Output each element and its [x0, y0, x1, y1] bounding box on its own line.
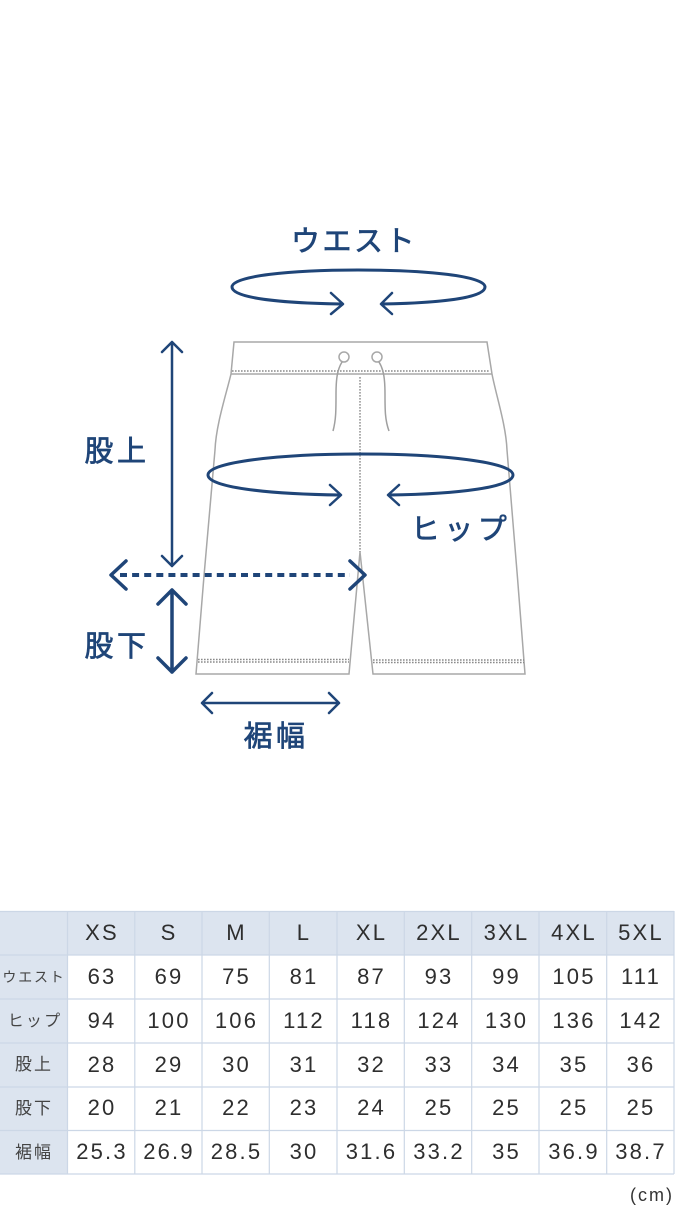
row: hip: 142: [619, 1008, 663, 1033]
row: hip: [8, 1007, 663, 1033]
label: rise: 股上: [84, 428, 150, 470]
left hem stitching: [198, 660, 349, 662]
row: inseam: 21: [155, 1095, 183, 1120]
row: inseam: 25: [492, 1095, 521, 1120]
row: hip: 118: [351, 1008, 392, 1033]
row: rise: 33: [425, 1052, 453, 1077]
row: rise: 36: [627, 1052, 655, 1077]
crotch dashed arrow: [111, 561, 365, 589]
row: hip: ヒップ: [8, 1007, 62, 1031]
row: waist: 93: [425, 964, 453, 989]
right drawcord: [372, 352, 389, 431]
row: inseam: 25: [627, 1095, 655, 1120]
header row: S: [161, 920, 177, 945]
row: hem width: 28.5: [211, 1139, 262, 1164]
label: waist: ウエスト: [291, 218, 417, 260]
row: inseam: 22: [222, 1095, 251, 1120]
centre seam: [359, 377, 361, 552]
table row header background: [0, 955, 68, 1174]
left drawcord: [333, 352, 349, 431]
label: hip: ヒップ: [411, 506, 511, 548]
row: waist: ウエスト: [2, 967, 66, 987]
row: hem width: 裾幅: [15, 1138, 53, 1163]
row: hem width: 31.6: [346, 1139, 397, 1164]
row: inseam: 25: [560, 1095, 588, 1120]
rise vertical arrow: [162, 342, 182, 566]
hem width arrow: [202, 693, 339, 713]
header row: L: [297, 920, 311, 945]
row: rise: 29: [155, 1052, 183, 1077]
header row: XL: [356, 920, 387, 945]
header row: 5XL: [618, 920, 664, 945]
row: hip: 136: [552, 1008, 596, 1033]
row: waist: 75: [222, 964, 251, 989]
row: waist: 69: [155, 964, 183, 989]
row: inseam: 股下: [15, 1094, 53, 1119]
header row: 3XL: [484, 920, 529, 945]
row: waist: 81: [290, 964, 318, 989]
header row: [85, 920, 664, 945]
row: hip: 124: [417, 1008, 461, 1033]
row: hem width: 26.9: [143, 1139, 195, 1164]
row: hem width: 33.2: [413, 1139, 465, 1164]
label: hem width: 裾幅: [243, 713, 309, 755]
header row: XS: [85, 920, 119, 945]
right hem stitching: [373, 660, 524, 662]
header row: 4XL: [551, 920, 597, 945]
row: waist: [2, 964, 661, 989]
row: rise: 31: [290, 1052, 318, 1077]
row: hip: 100: [147, 1008, 191, 1033]
row: hem width: 30: [290, 1139, 318, 1164]
waistband stitching: [232, 370, 490, 372]
row: waist: 87: [357, 964, 386, 989]
table header background: [0, 911, 674, 955]
row: waist: 63: [88, 964, 116, 989]
row: rise: 34: [492, 1052, 521, 1077]
row: rise: 30: [222, 1052, 251, 1077]
row: hem width: [15, 1138, 667, 1164]
label: inseam: 股下: [84, 623, 150, 665]
row: hip: 130: [485, 1008, 528, 1033]
row: waist: 105: [552, 964, 596, 989]
row: hip: 94: [88, 1008, 116, 1033]
row: inseam: 23: [290, 1095, 318, 1120]
row: rise: 股上: [15, 1050, 53, 1075]
shorts outline: [196, 342, 525, 674]
row: inseam: 24: [357, 1095, 386, 1120]
row: hem width: 38.7: [615, 1139, 667, 1164]
shorts illustration: [196, 342, 525, 674]
header row: 2XL: [416, 920, 462, 945]
waist measurement arrow: [232, 270, 485, 314]
row: rise: 35: [560, 1052, 588, 1077]
row: inseam: 25: [425, 1095, 453, 1120]
row: hem width: 35: [492, 1139, 521, 1164]
row: waist: 99: [492, 964, 521, 989]
row: inseam: [15, 1094, 655, 1120]
header row: M: [226, 920, 247, 945]
hip measurement arrow: [208, 454, 513, 505]
row: hem width: 25.3: [76, 1139, 128, 1164]
table grid: [0, 911, 674, 1174]
row: inseam: 20: [88, 1095, 116, 1120]
row: waist: 111: [621, 964, 661, 989]
row: rise: [15, 1050, 655, 1077]
row: hip: 106: [215, 1008, 258, 1033]
row: rise: 28: [88, 1052, 116, 1077]
waistband lower edge: [231, 373, 492, 375]
unit note: (cm): [630, 1185, 674, 1205]
row: hem width: 36.9: [548, 1139, 600, 1164]
size table: [0, 911, 674, 1174]
row: hip: 112: [283, 1008, 325, 1033]
inseam vertical arrow: [158, 590, 186, 672]
row: rise: 32: [357, 1052, 386, 1077]
